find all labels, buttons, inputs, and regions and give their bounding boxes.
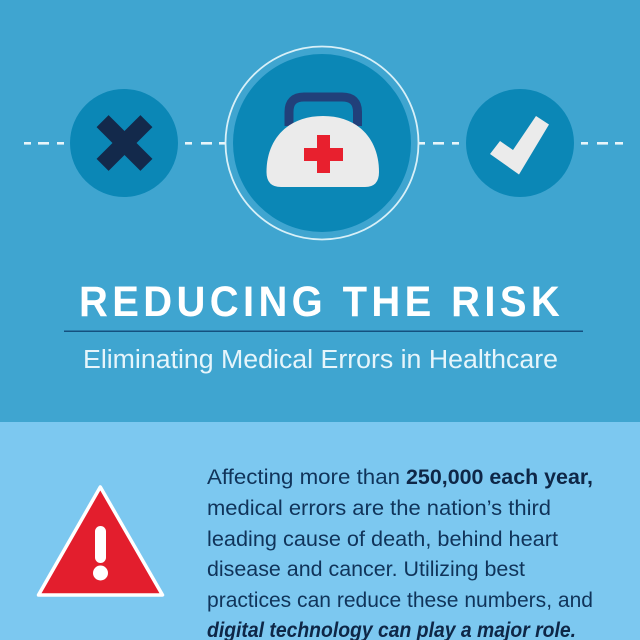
title: REDUCING THE RISK	[79, 277, 560, 325]
body text	[207, 465, 593, 640]
subtitle: Eliminating Medical Errors in Healthcare	[83, 346, 558, 374]
body text: leading cause of death, behind heart	[207, 527, 558, 551]
body text: medical errors are the nation’s third	[207, 496, 551, 520]
body text: Affecting more than	[207, 465, 400, 489]
body text: disease and cancer. Utilizing best	[207, 557, 525, 581]
header panel	[0, 0, 640, 422]
dashed connector line	[24, 142, 623, 145]
icon: medical bag in ring	[226, 46, 418, 240]
icon: check mark in circle	[466, 89, 574, 197]
icon: warning triangle	[38, 487, 162, 595]
icon: X mark in circle	[70, 89, 178, 197]
body text: 250,000 each year,	[406, 465, 593, 489]
body text: practices can reduce these numbers, and	[207, 588, 593, 612]
divider rule	[64, 330, 583, 332]
intro panel	[0, 422, 640, 640]
